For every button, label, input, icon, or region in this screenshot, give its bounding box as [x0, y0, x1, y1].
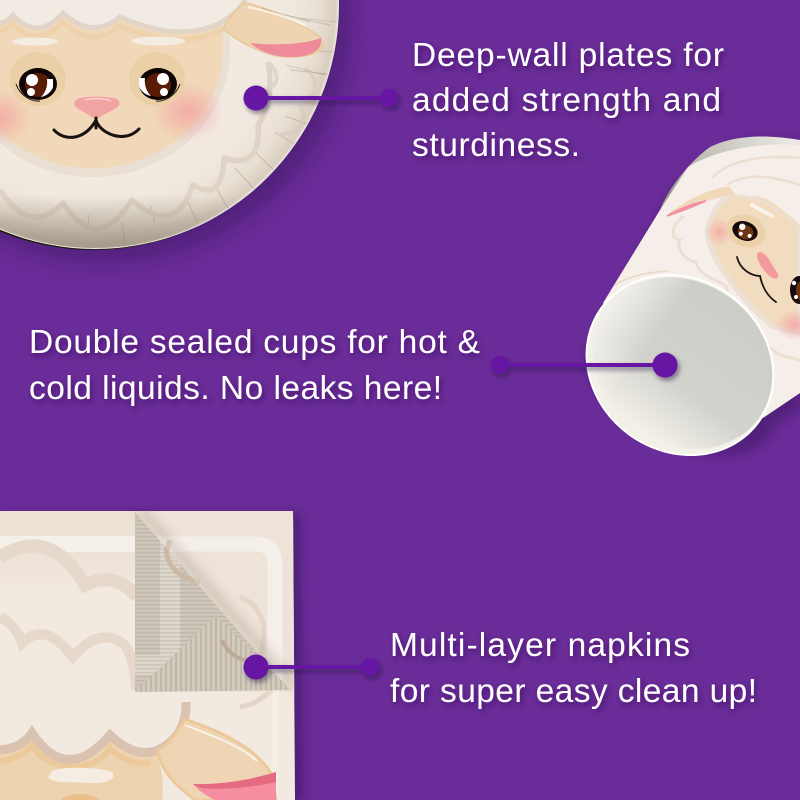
text: plates: sturdiness. [412, 127, 580, 164]
wool scallop lower [0, 617, 136, 690]
text: plates: Deep-wall plates for [412, 37, 724, 74]
text: cups [29, 324, 480, 407]
cup base [550, 237, 800, 493]
eye patch [726, 214, 766, 248]
nose [757, 252, 778, 279]
hood wool [0, 0, 245, 32]
eye patches [10, 52, 66, 106]
napkin: folded lamb napkin [0, 509, 303, 800]
hood wool [733, 188, 800, 224]
connector: napkin [244, 654, 379, 680]
text: plates: added strength and [412, 82, 721, 119]
wool outline [673, 216, 800, 360]
hood shadow scallop [0, 22, 225, 40]
text: napkins [390, 627, 757, 710]
face [0, 23, 230, 177]
icon: wool fluff on rim [262, 62, 315, 134]
wool scallop upper [0, 546, 137, 597]
eye one [732, 221, 758, 241]
text: plates [412, 37, 724, 164]
right eye [139, 68, 180, 101]
text: napkins: Multi-layer napkins [390, 627, 690, 664]
nose [74, 97, 120, 118]
ear [158, 719, 276, 800]
ear [667, 187, 735, 215]
wool body fill [0, 735, 154, 755]
text: cups: cold liquids. No leaks here! [29, 370, 442, 407]
ear [223, 3, 323, 57]
mouth [54, 118, 139, 137]
mouth [737, 257, 776, 302]
eyebrows [12, 38, 58, 46]
left eye [16, 68, 57, 101]
text: napkins: for super easy clean up! [390, 673, 757, 710]
brow [48, 768, 113, 783]
folded corner [135, 512, 295, 692]
connector: plate [244, 86, 398, 110]
wool bottom edge [0, 702, 186, 760]
cup: lamb face paper cup [585, 136, 800, 458]
connector: cup [491, 352, 678, 378]
wool bottom scallop [0, 62, 270, 228]
lamb face [0, 735, 163, 800]
text: cups: Double sealed cups for hot & [29, 324, 480, 361]
plate: lamb face paper plate [0, 0, 351, 263]
eye two [790, 276, 800, 304]
